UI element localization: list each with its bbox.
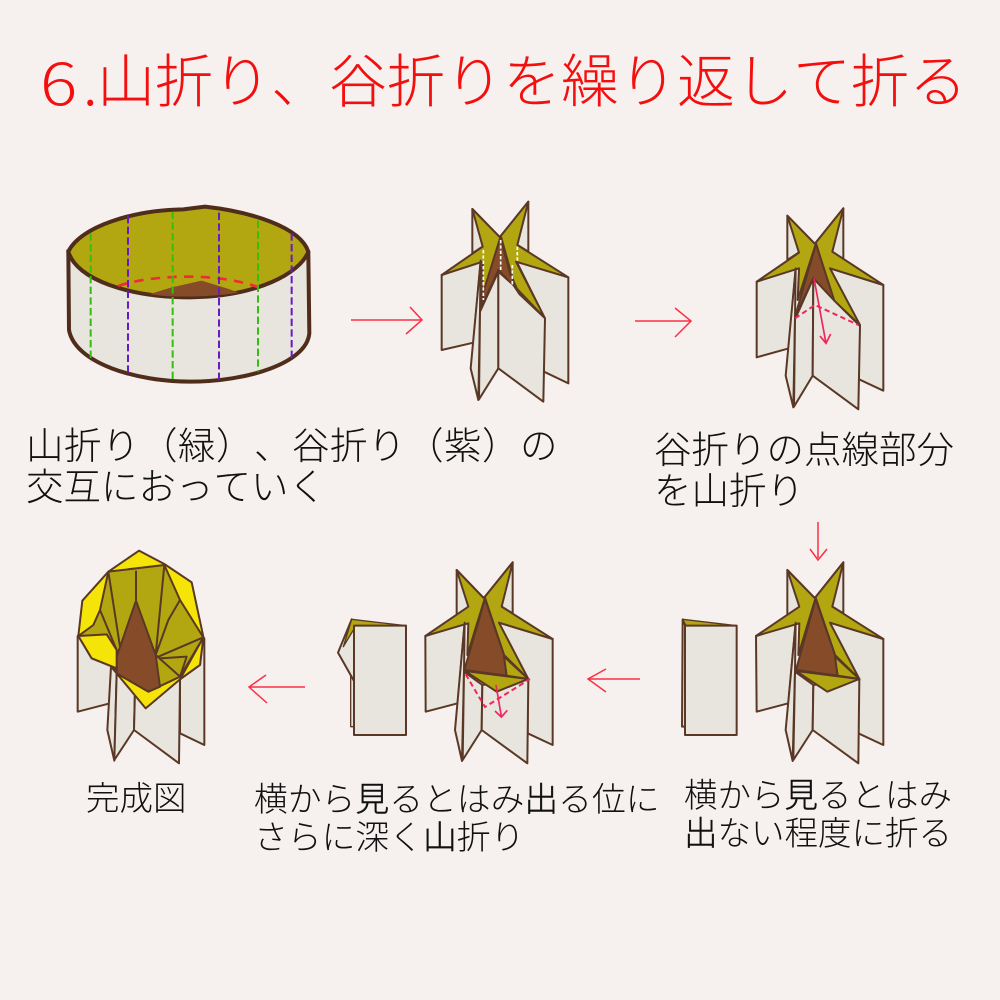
arrow 3: [588, 669, 640, 692]
caption: step 3: を山折り: [654, 470, 804, 512]
caption: step 3: 谷折りの点線部分: [654, 429, 954, 471]
arrow 4: [249, 675, 305, 703]
caption: step 5: さらに深く山折り: [254, 819, 524, 857]
title: .: [83, 38, 98, 122]
side view with flap: [338, 619, 406, 735]
step 2: folded star: [442, 202, 568, 402]
arrow 1: [351, 307, 422, 334]
step 1: paper cylinder with fold lines: [68, 207, 309, 382]
step 6: completed figure: [78, 551, 204, 763]
caption: step 4: [684, 778, 952, 853]
caption: step 5: [254, 781, 660, 857]
caption: completed figure: 完成図: [86, 781, 186, 818]
caption: step 1: 山折り（緑）、谷折り（紫）の: [26, 425, 558, 467]
step 3: star with pink fold line: [757, 208, 883, 409]
arrow 2: [635, 308, 691, 337]
caption: step 1: 交互におっていく: [26, 466, 326, 508]
caption: step 4: 横から見るとはみ: [684, 778, 952, 815]
caption: step 4: 出ない程度に折る: [684, 816, 952, 853]
down arrow: [810, 522, 827, 560]
caption: step 1: [26, 425, 558, 508]
title: 山折り、谷折りを繰り返して折る: [97, 50, 967, 115]
step 5: side view and deeper fold: [338, 562, 553, 763]
side view: [682, 619, 737, 735]
caption: step 3: [654, 429, 954, 512]
step 4: side view and folded star: [682, 562, 883, 763]
title: 6: [40, 38, 77, 122]
caption: step 5: 横から見るとはみ出る位に: [254, 781, 660, 819]
